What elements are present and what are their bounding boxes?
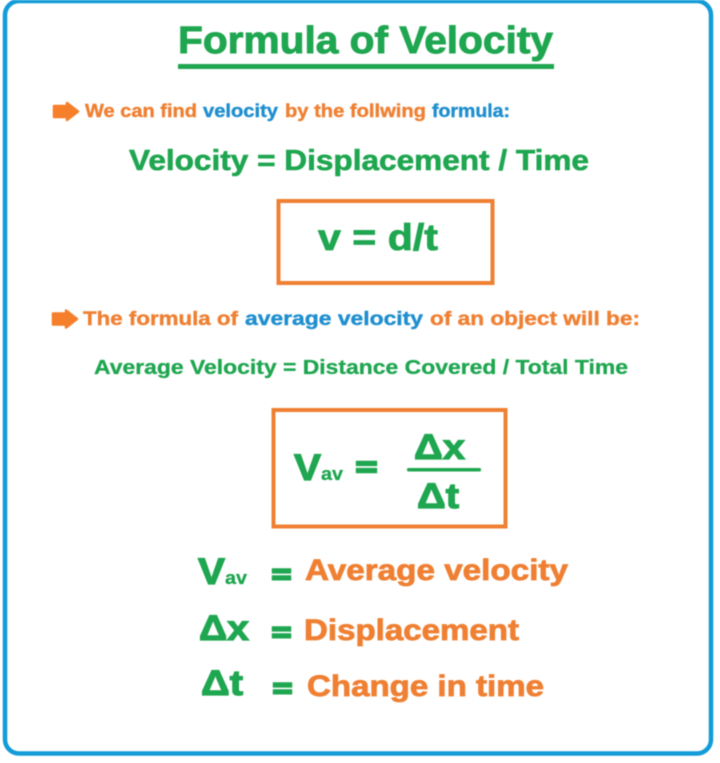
formula box 1 bbox=[278, 201, 492, 283]
V average symbol: V bbox=[294, 447, 321, 488]
intro line 1: by the follwing bbox=[285, 101, 426, 121]
legend row: delta t: = bbox=[273, 673, 292, 703]
legend row: V average: = bbox=[272, 559, 291, 589]
formula box 2 bbox=[274, 410, 506, 526]
intro line 2: The formula of bbox=[83, 308, 239, 330]
denominator delta t: Δt bbox=[417, 477, 459, 516]
intro line 1: velocity bbox=[203, 101, 278, 121]
legend row: delta t: Change in time bbox=[307, 670, 544, 703]
intro line 1: formula: bbox=[432, 101, 510, 121]
V average symbol: av bbox=[321, 464, 343, 484]
average velocity word formula: Average Velocity = Distance Covered / Total Time bbox=[94, 357, 628, 379]
intro line 2: of an object will be: bbox=[430, 308, 640, 330]
intro line 2 bbox=[83, 308, 640, 330]
legend row: delta x: = bbox=[272, 617, 291, 647]
legend row: V average: Average velocity bbox=[305, 554, 568, 587]
V average symbol bbox=[294, 447, 343, 488]
title: Formula of Velocity bbox=[178, 20, 553, 62]
fraction line bbox=[407, 468, 481, 472]
legend row: delta x: Δx bbox=[199, 609, 250, 648]
velocity word formula: Velocity = Displacement / Time bbox=[129, 145, 589, 177]
intro line 2: average velocity bbox=[245, 308, 423, 330]
legend row: delta x bbox=[199, 609, 519, 648]
intro line 1: We can find bbox=[85, 101, 197, 121]
icon: orange arrow 2 bbox=[53, 310, 77, 328]
formula v = d/t: v = d/t bbox=[318, 217, 438, 258]
numerator delta x: Δx bbox=[414, 428, 466, 467]
legend row: delta t bbox=[201, 664, 544, 703]
legend row: delta x: Displacement bbox=[304, 614, 519, 647]
legend row: V average bbox=[198, 551, 568, 592]
icon: orange arrow 1 bbox=[54, 103, 78, 120]
equals sign: = bbox=[356, 452, 377, 482]
intro line 1 bbox=[85, 101, 510, 121]
legend row: V average: av bbox=[225, 568, 247, 588]
legend row: delta t: Δt bbox=[201, 664, 243, 703]
legend row: V average: V bbox=[198, 551, 225, 592]
